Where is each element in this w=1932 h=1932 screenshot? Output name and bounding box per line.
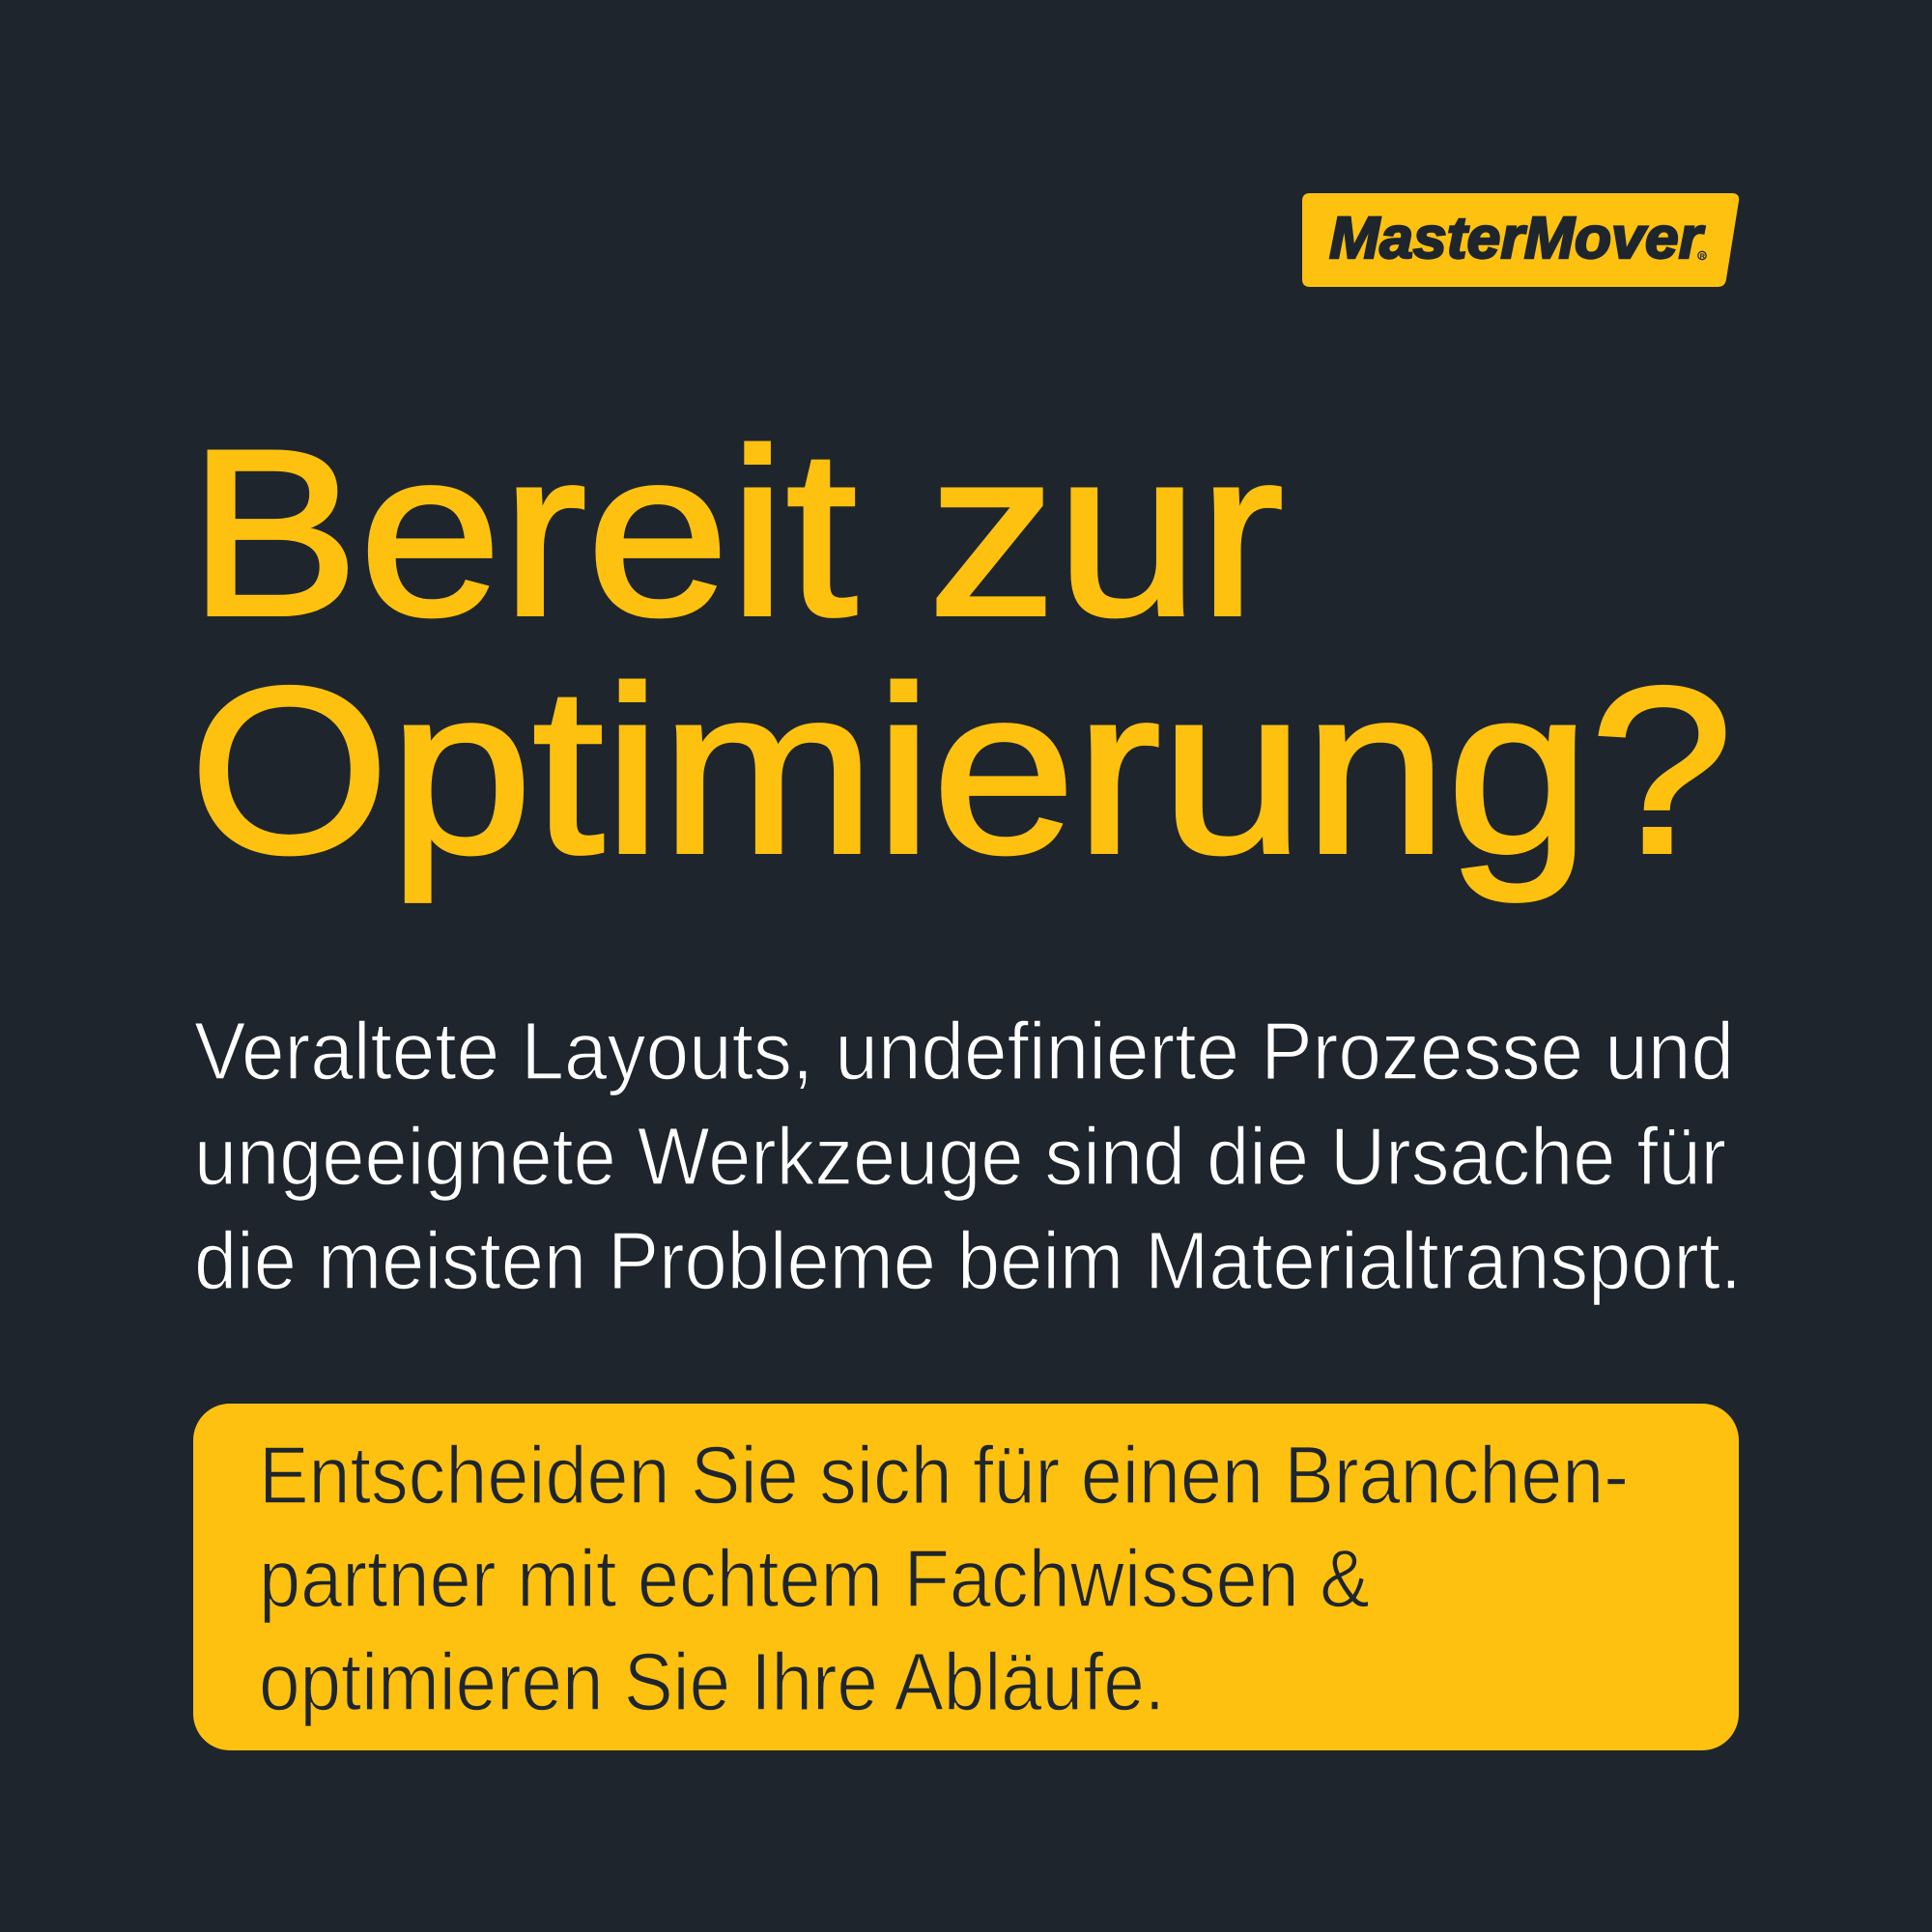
title: Optimierung?	[189, 638, 1733, 902]
body text: Veraltete Layouts, undefinierte Prozesse und	[194, 1006, 1734, 1096]
callout panel	[193, 1404, 1739, 1750]
body text: ungeeignete Werkzeuge sind die Ursache für	[194, 1111, 1726, 1202]
callout text: partner mit echtem Fachwissen &	[259, 1533, 1370, 1624]
callout text	[259, 1430, 1629, 1727]
logo: MasterMover	[1302, 193, 1739, 287]
logo: MasterMover: MasterMover	[1329, 205, 1705, 270]
body text	[194, 1006, 1742, 1306]
body text: die meisten Probleme beim Materialtransport.	[194, 1215, 1742, 1306]
title: Bereit zur	[188, 400, 1284, 665]
callout text: Entscheiden Sie sich für einen Branchen-	[259, 1430, 1629, 1520]
title	[188, 400, 1733, 902]
logo: MasterMover: R	[1700, 251, 1706, 260]
callout text: optimieren Sie Ihre Abläufe.	[259, 1636, 1165, 1727]
